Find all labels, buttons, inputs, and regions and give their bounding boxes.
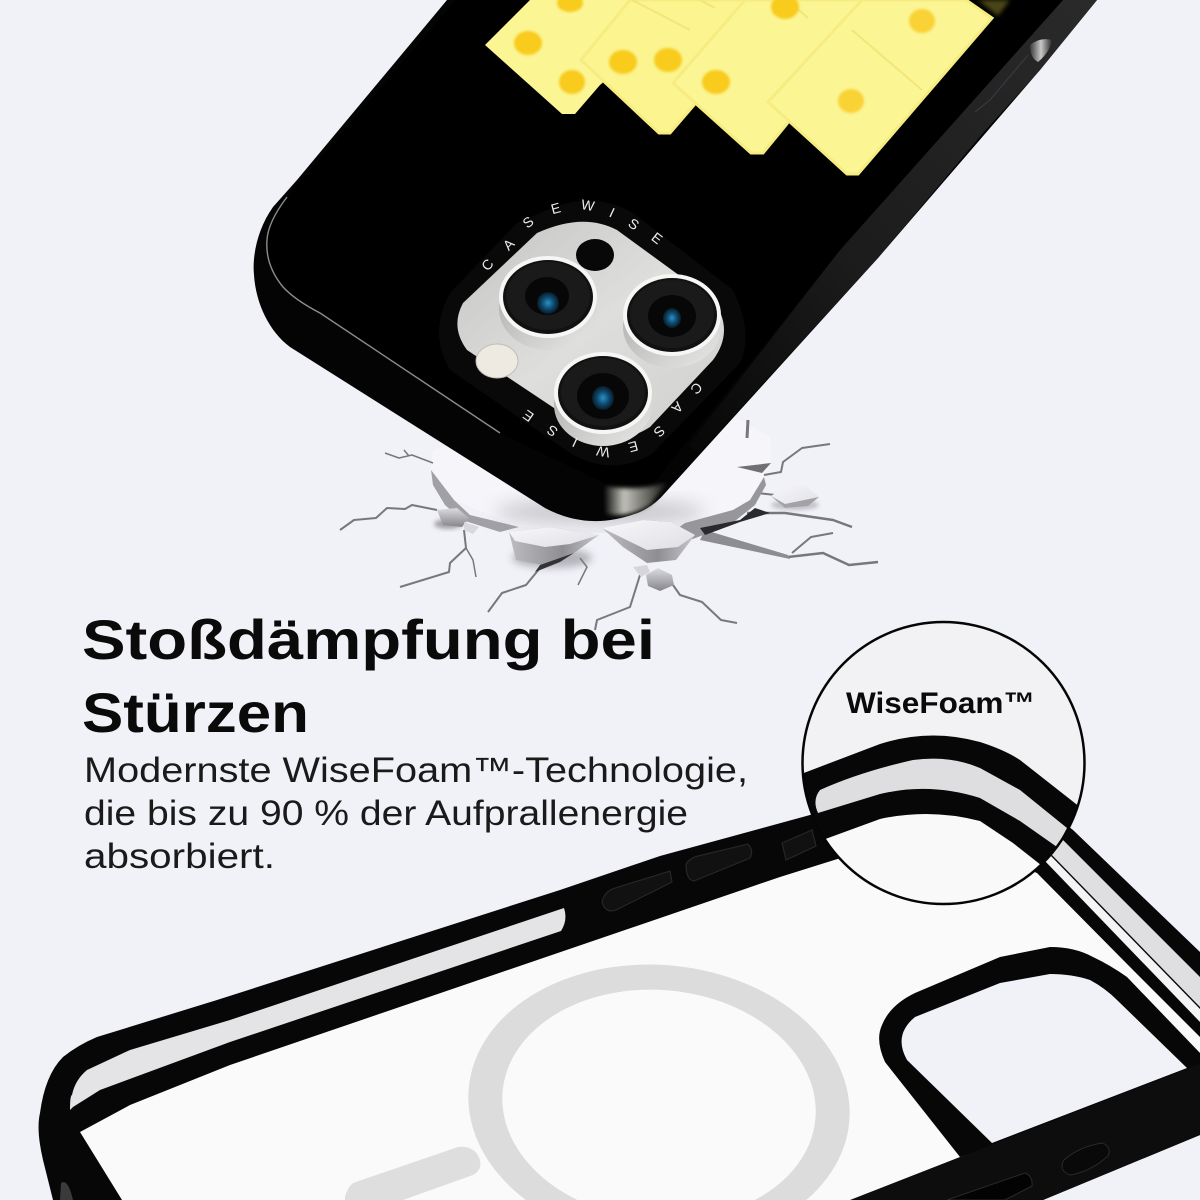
wedge shard right [737,463,771,473]
lens bottom [554,352,652,446]
lower-right frame [850,1064,1200,1200]
CASEWISE ring lettering: S [625,215,642,233]
crack lines [340,420,878,630]
case interior [80,830,1200,1200]
silver camera plate [457,222,724,438]
body text: die bis zu 90 % der Aufprallenergie [84,794,688,833]
side button [1030,39,1052,62]
domino dividers [632,0,922,90]
dark corner glow [978,0,1010,16]
magnifier callout: WiseFoam [801,620,1086,906]
CASEWISE ring lettering: W [580,196,597,214]
chunk centre large [602,520,695,563]
CASEWISE ring lettering: C [687,379,706,398]
body text: Modernste WiseFoam™-Technologie, [84,751,748,790]
island bumper [439,201,746,465]
CASEWISE ring lettering: I [607,204,617,221]
foam strip right [1050,840,1200,1007]
magsafe alignment pill [345,1147,480,1200]
clear case [39,750,1200,1200]
camera island [439,196,746,465]
CASEWISE ring lettering: S [651,423,668,440]
lens ring [802,622,1084,904]
domino pips [514,0,935,113]
lens top-left [499,256,597,350]
thin white seam right [1044,855,1200,1022]
chunk left small [434,508,479,534]
CASEWISE ring lettering: E [648,229,666,247]
left corner slot [60,1182,73,1200]
button seam [975,55,1028,112]
domino 2 [581,0,790,133]
case side rim [688,0,1097,452]
domino 3 [673,0,880,153]
crater edge right [675,477,766,540]
CASEWISE ring lettering [478,196,706,461]
CASEWISE ring lettering: E [520,407,537,425]
CASEWISE ring lettering: A [668,399,686,417]
crater edge left [431,470,519,532]
impact crater with cracks [340,420,878,630]
heading [82,608,655,744]
microphone hole [576,239,614,271]
lens right [623,274,721,368]
camera cutout frame [879,947,1200,1157]
wedge crack right [700,530,790,559]
foam strip left [70,908,565,1110]
lower button [947,1173,1032,1200]
body text: absorbiert. [84,837,275,876]
CASEWISE ring lettering: S [519,213,537,231]
chunk left large [509,527,599,572]
bumper highlight line [267,197,500,433]
dark gap [700,508,770,535]
phone silhouette [254,0,1097,521]
black back panel [267,0,1063,500]
domino tiles [485,0,1010,174]
domino 1 [485,0,700,114]
domino 4 [768,0,992,174]
chunk right small [771,485,819,510]
callout label: WiseFoam™ [846,687,1035,720]
port oval [1062,1143,1109,1175]
CASEWISE ring lettering: I [570,434,580,451]
CASEWISE ring lettering: W [594,443,611,461]
CASEWISE ring lettering: C [478,256,497,274]
soft shadow under phone [495,499,705,525]
heading: Stürzen [82,681,309,744]
CASEWISE ring lettering: E [549,199,562,217]
heading: Stoßdämpfung bei [82,608,655,671]
bumper reflection [605,482,668,515]
magnified frame [804,736,1077,864]
CASEWISE ring lettering: A [500,235,518,253]
chunk bottom small [633,565,674,591]
body text [84,751,748,876]
CASEWISE ring lettering: S [544,422,561,440]
side buttons top [602,830,816,911]
flash [476,344,518,378]
cracked floor plate [431,420,771,530]
CASEWISE ring lettering: E [627,438,640,456]
lens fill [802,622,1084,904]
case black frame [39,750,1200,1200]
phone with black case [254,0,1097,521]
magsafe ring [468,965,850,1200]
camera cutout window [902,974,1187,1143]
